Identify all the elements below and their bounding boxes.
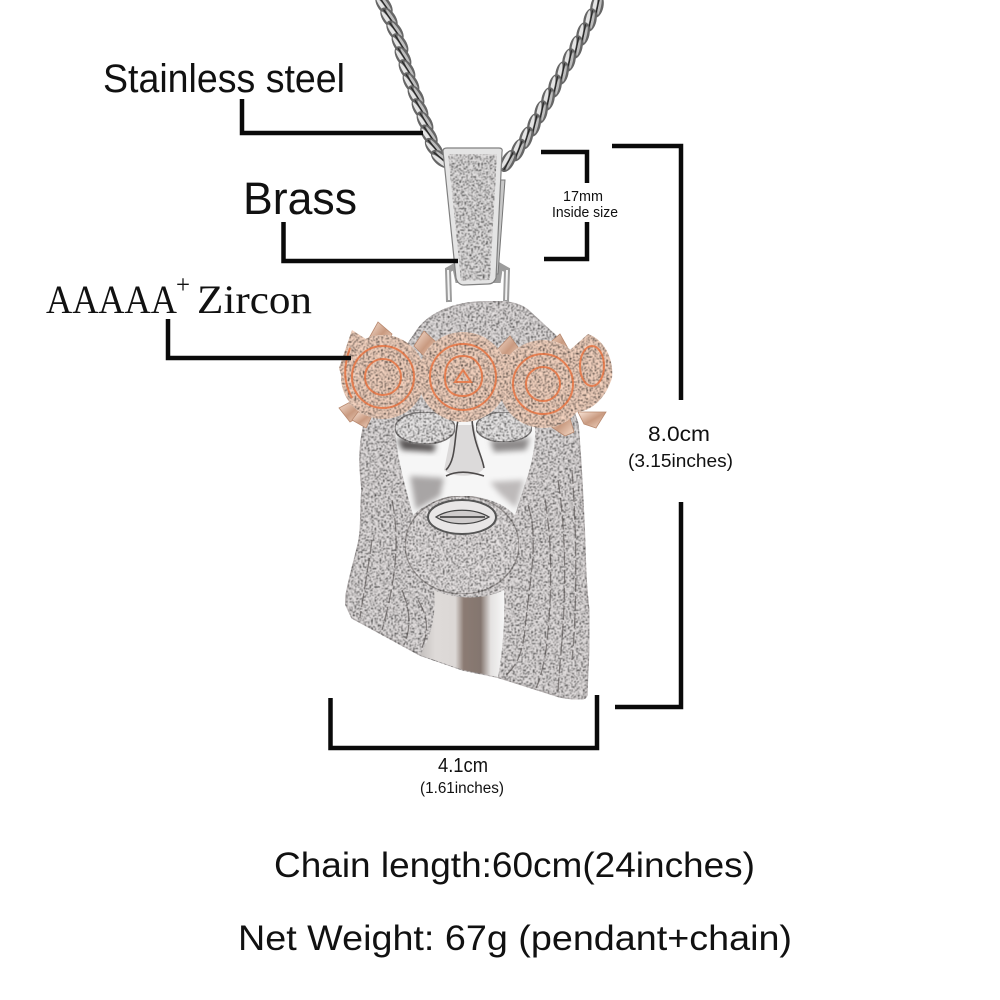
- text: net weight: Net Weight: 67g (pendant+chain): [238, 919, 792, 958]
- callout: AAAAA+ Zircon: AAAAA: [46, 277, 177, 322]
- pendant: rose gold flower crown: [339, 322, 612, 436]
- pendant: beard: [405, 496, 519, 594]
- crown leaves: [339, 322, 606, 436]
- hair strands: [360, 470, 576, 695]
- callout: Stainless steel: [103, 57, 423, 133]
- pendant: hair and head: [345, 301, 589, 699]
- dimension: width 4.1cm: 4.1cm: [438, 755, 488, 777]
- pendant: neck: [420, 590, 504, 677]
- chain: left rope: [372, 0, 454, 172]
- callout: AAAAA+ Zircon: +: [176, 270, 190, 299]
- callout: Brass: Brass: [243, 173, 357, 224]
- dimension: height 8.0cm: (3.15inches): [628, 451, 733, 471]
- dimension: height 8.0cm: [612, 146, 733, 707]
- text: chain length: Chain length:60cm(24inches): [274, 846, 755, 885]
- pendant: mouth: [428, 500, 496, 534]
- crown roses: [339, 330, 612, 428]
- dimension: width 4.1cm: (1.61inches): [420, 780, 504, 797]
- dimension: height 8.0cm: 8.0cm: [648, 423, 710, 446]
- link loop: [448, 266, 507, 302]
- callout: AAAAA+ Zircon: [46, 270, 351, 358]
- crown rose rings: [345, 344, 604, 414]
- callout: Brass: [243, 173, 458, 261]
- chain: right rope: [497, 0, 606, 175]
- dimension: 17mm inside size: 17mm: [563, 189, 603, 205]
- pendant: eyes: [395, 412, 532, 444]
- pendant: polished face: [395, 414, 535, 515]
- callout: Stainless steel: Stainless steel: [103, 57, 345, 101]
- dimension: 17mm inside size: Inside size: [552, 205, 618, 221]
- pendant bail: [443, 148, 505, 285]
- dimension: 17mm inside size: [541, 152, 618, 259]
- dimension: width 4.1cm: [330, 695, 597, 797]
- callout: AAAAA+ Zircon: Zircon: [197, 277, 312, 322]
